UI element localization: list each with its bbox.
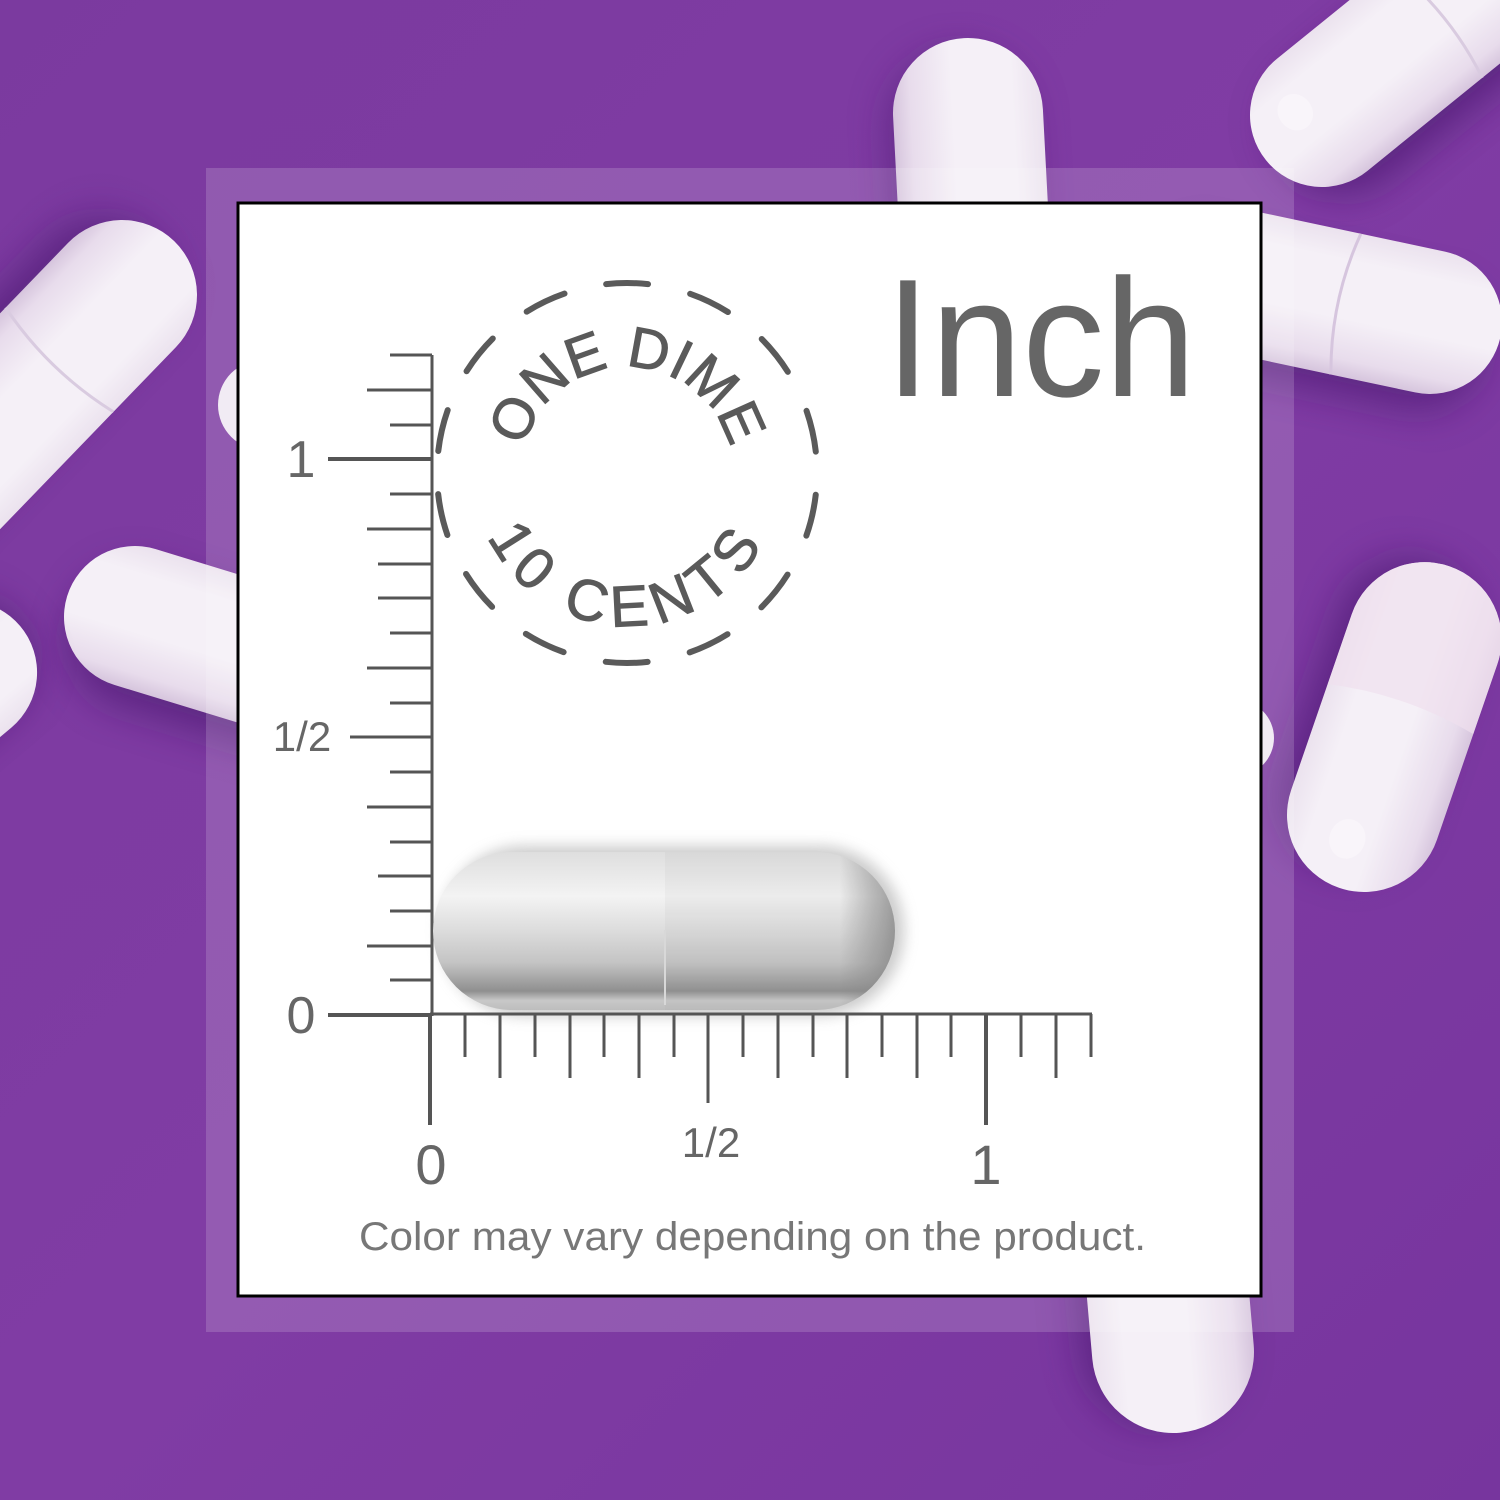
vertical ruler labels: 0	[287, 987, 315, 1045]
vertical ruler labels: 1	[287, 431, 315, 489]
capsule: bottom	[1054, 1007, 1261, 1441]
horizontal ruler labels: 1/2	[682, 1119, 740, 1166]
dime outline	[435, 280, 819, 666]
heading: Inch: Inch	[885, 244, 1196, 432]
horizontal ruler labels	[415, 1119, 1002, 1196]
vertical ruler	[328, 355, 432, 1016]
capsule: right lower	[1268, 548, 1500, 892]
label: 10 CENTS: 10 CENTS	[488, 524, 758, 628]
label: ONE DIME: ONE DIME	[492, 326, 767, 446]
vertical ruler labels	[273, 431, 331, 1045]
horizontal ruler	[430, 1014, 1092, 1125]
horizontal ruler labels: 0	[415, 1133, 447, 1196]
capsule: top centre	[884, 34, 1062, 482]
capsule: top right	[1221, 0, 1500, 230]
capsule: small part left of card	[218, 360, 318, 450]
translucent panel	[206, 168, 1294, 1332]
capsule: left bottom	[0, 571, 67, 874]
capsule: left upper	[0, 179, 228, 610]
capsule: small part right of card	[1180, 700, 1274, 776]
capsule: left middle	[41, 528, 490, 805]
dashed circle	[417, 263, 837, 683]
capsule in card	[433, 846, 904, 1016]
horizontal ruler labels: 1	[970, 1133, 1002, 1196]
capsule: right	[1137, 193, 1500, 425]
white card	[238, 203, 1261, 1296]
vertical ruler labels: 1/2	[273, 713, 331, 760]
footnote: Color may vary depending on the product.	[359, 1215, 1146, 1259]
